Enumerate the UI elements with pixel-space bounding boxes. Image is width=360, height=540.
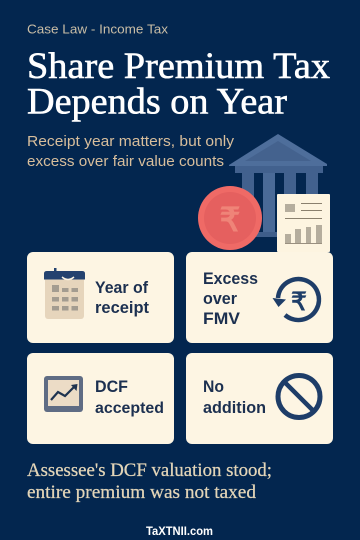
icon: prohibition sign (278, 376, 320, 418)
panel: DCF accepted (27, 353, 174, 444)
label: excess over FMV (203, 270, 258, 328)
label: excess over FMV: Excess (203, 270, 258, 288)
conclusion text: Assessee's DCF valuation stood; (27, 460, 272, 481)
label: year of receipt (95, 279, 150, 317)
subtitle: excess over fair value counts (27, 154, 224, 170)
conclusion text (27, 460, 272, 503)
icon: rupee coin: ₹ (220, 201, 240, 238)
conclusion text: entire premium was not taxed (27, 482, 256, 503)
label: no addition (203, 378, 266, 417)
label: excess over FMV: over (203, 290, 238, 308)
title: Depends on Year (27, 82, 288, 122)
title: Share Premium Tax (27, 46, 330, 87)
label: year of receipt: receipt (95, 299, 150, 317)
icon: chart monitor (44, 376, 83, 412)
icon: calendar (44, 268, 85, 319)
panel: no addition (186, 353, 333, 444)
icon: rupee refund arrow (272, 279, 319, 320)
subtitle: Receipt year matters, but only (27, 134, 235, 150)
label: no addition: addition (203, 399, 266, 417)
subtitle (27, 134, 235, 170)
panel: year of receipt (27, 252, 174, 343)
label: no addition: No (203, 378, 224, 396)
icon: rupee coin (198, 186, 262, 250)
icon: bank building (229, 134, 327, 237)
icon: report document (277, 194, 330, 252)
label: year of receipt: Year of (95, 279, 148, 297)
icon: rupee refund arrow: ₹ (291, 288, 307, 316)
label: DCF accepted (95, 378, 164, 417)
label: DCF accepted: accepted (95, 400, 164, 417)
label: DCF accepted: DCF (95, 378, 128, 396)
panel: excess over FMV (186, 252, 333, 343)
label: excess over FMV: FMV (203, 310, 240, 328)
eyebrow: Case Law - Income Tax (27, 22, 169, 36)
footer brand: TaXTNII.com (146, 526, 213, 538)
title (27, 46, 330, 122)
